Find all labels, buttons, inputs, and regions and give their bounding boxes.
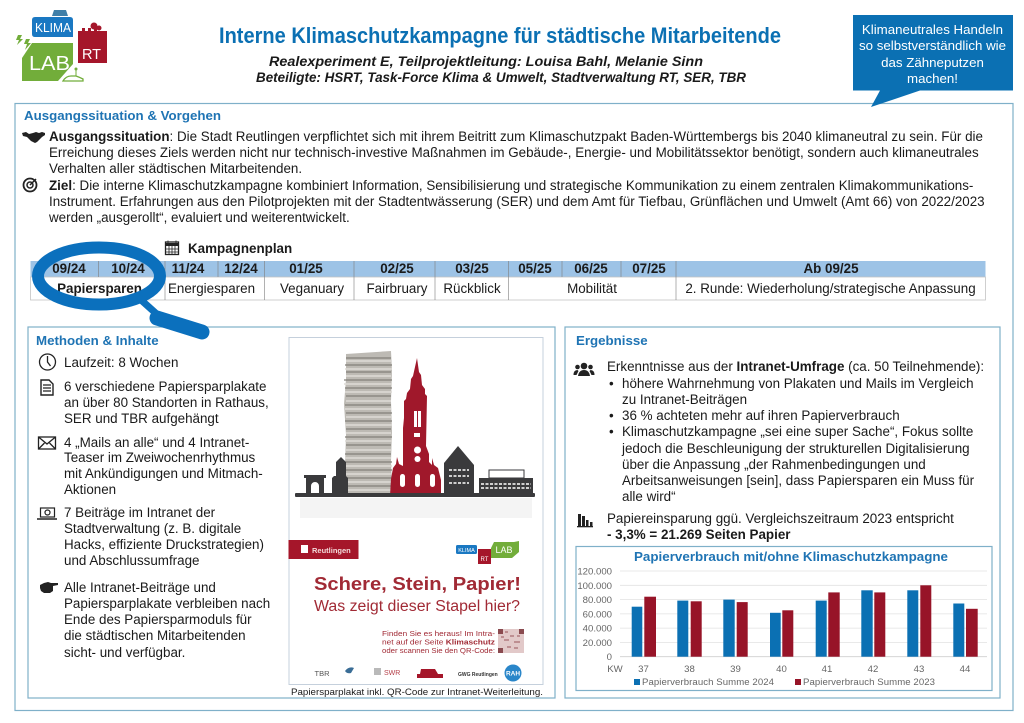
table: Kampagnenplan: 01/25: [289, 261, 323, 276]
x axis labels: 43: [914, 664, 924, 675]
logo: Klima Lab RT: RT: [82, 47, 101, 63]
y axis labels: 60.000: [583, 609, 612, 620]
table: Kampagnenplan: 06/25: [574, 261, 608, 276]
icon: envelope: [38, 437, 56, 449]
text: Mails und Teaser: mit Ankündigungen und Mitmach-: [64, 466, 263, 481]
table: Kampagnenplan: 2. Runde: Wiederholung/strategische Anpassung: [685, 281, 976, 296]
icon: document: [41, 380, 53, 395]
text: Verbleib: Ende des Papiersparmoduls für: [64, 612, 252, 627]
callout: slogan: Klimaneutrales Handeln: [862, 22, 1003, 37]
icon: QR code: [498, 629, 524, 653]
x axis labels: [607, 664, 971, 675]
partner logos: [314, 664, 522, 682]
table: Kampagnenplan: 10/24: [111, 261, 145, 276]
heading: Ergebnisse: Ergebnisse: [576, 333, 648, 348]
y axis labels: 40.000: [583, 624, 612, 635]
text block: Umfrage-Erkenntnisse: höhere Wahrnehmung von Plakaten und Mails im Vergleich: [622, 376, 974, 391]
logo: small Klima Lab RT: RT: [481, 557, 489, 563]
table: Kampagnenplan: Energiesparen: [168, 281, 255, 296]
text block: Ziel: [48, 178, 985, 225]
text block: Ziel: Instrument. Erfahrungen aus den Pilotprojekten mit der Stadtentwässerung (SER) und dem Amt für Tiefbau, Grünflächen und Umwelt (Amt 66) von 2022/2023: [49, 194, 985, 209]
partner logos: SWR: [384, 670, 400, 677]
table: Kampagnenplan: 03/25: [455, 261, 489, 276]
text: Beiträge: und Abschlussumfrage: [64, 553, 199, 568]
callout: slogan: [853, 15, 1013, 107]
text: Papiereinsparung: [607, 511, 954, 542]
text block: Ausgangssituation: Verhalten aller städtischen Mitarbeitenden.: [49, 161, 302, 176]
text block: Umfrage-Erkenntnisse: [607, 359, 984, 504]
table: Kampagnenplan: 07/25: [632, 261, 666, 276]
heading: Ausgangssituation & Vorgehen: Ausgangssituation & Vorgehen: [24, 108, 221, 123]
table: Kampagnenplan: Fairbruary: [366, 281, 428, 296]
x axis labels: 44: [960, 664, 971, 675]
text block: Umfrage-Erkenntnisse: Erkenntnisse aus der Intranet-Umfrage (ca. 50 Teilnehmende):: [607, 359, 984, 374]
icon: target: [24, 178, 36, 192]
icon: magnifying glass: [38, 248, 202, 332]
partner logos: GWG Reutlingen: [458, 672, 498, 678]
y axis labels: [577, 566, 612, 663]
table: Kampagnenplan: 05/25: [518, 261, 552, 276]
text: Verbleib: Alle Intranet-Beiträge und: [64, 580, 216, 595]
table: Kampagnenplan: 12/24: [224, 261, 258, 276]
logo: Reutlingen: [288, 540, 358, 559]
y axis labels: 20.000: [583, 638, 612, 649]
heading: Kampagnenplan: Kampagnenplan: [188, 241, 292, 256]
x axis labels: 39: [730, 664, 741, 675]
x axis labels: 41: [822, 664, 832, 675]
logo: Klima Lab RT: KLIMA: [35, 21, 72, 35]
icon: bar chart: [577, 514, 593, 527]
poster QR instructions: [382, 629, 495, 655]
text: Beiträge: 7 Beiträge im Intranet der: [64, 505, 216, 520]
text: Papiersparplakate: an über 80 Standorten in Rathaus,: [64, 395, 269, 410]
icon: people group: [574, 363, 594, 376]
bars 2023: [644, 585, 978, 657]
partner logos: TBR: [314, 669, 330, 678]
text block: Umfrage-Erkenntnisse: •: [609, 376, 614, 391]
text: Verbleib: Papiersparplakate verbleiben nach: [64, 596, 270, 611]
poster subheadline: Was zeigt dieser Stapel hier?: [314, 598, 520, 615]
text: Beiträge: Stadtverwaltung (z. B. digitale: [64, 521, 241, 536]
logo: Klima Lab RT: [16, 10, 107, 81]
text block: Umfrage-Erkenntnisse: über die Anpassung „der Rahmenbedingungen und: [622, 457, 926, 472]
icon: clock: [40, 354, 56, 370]
logo: Reutlingen: Reutlingen: [312, 546, 351, 555]
table: Kampagnenplan: [30, 261, 986, 300]
x axis labels: KW: [607, 664, 624, 675]
legend: Papierverbrauch Summe 2023: [803, 677, 935, 688]
subtitle: participants: Beteiligte: HSRT, Task-Force Klima & Umwelt, Stadtverwaltung RT, SER, TBR: [256, 70, 746, 85]
table: Kampagnenplan: 02/25: [380, 261, 414, 276]
image: red church silhouette: [390, 358, 441, 496]
callout: slogan: das Zähneputzen: [881, 55, 984, 70]
partner logos: RAH: [506, 670, 520, 678]
legend: [634, 677, 935, 688]
image: dark skyline buildings: [295, 446, 535, 497]
table: Kampagnenplan: Papiersparen: [57, 281, 142, 296]
x axis labels: 40: [776, 664, 787, 675]
text: Papiersparplakate: SER und TBR aufgehängt: [64, 411, 219, 426]
text: Mails und Teaser: Aktionen: [64, 482, 116, 497]
poster QR instructions: oder scannen Sie den QR-Code:: [382, 646, 495, 655]
poster QR instructions: net auf der Seite Klimaschutz: [382, 638, 495, 646]
text: Laufzeit: Laufzeit: 8 Wochen: [64, 355, 178, 370]
text block: Umfrage-Erkenntnisse: Arbeitsanweisungen [sein], dass Papiersparen ein Muss für: [622, 473, 975, 488]
image: church windows: [400, 411, 435, 487]
text: Mails und Teaser: 4 „Mails an alle“ und 4 Intranet-: [64, 435, 249, 450]
icon: calendar: [165, 240, 179, 254]
subtitle: project lead: Realexperiment E, Teilprojektleitung: Louisa Bahl, Melanie Sinn: [269, 54, 703, 69]
chart title: Papierverbrauch mit/ohne Klimaschutzkampagne: [634, 549, 948, 564]
text: Verbleib: sicht- und verfügbar.: [64, 645, 185, 660]
table: Kampagnenplan: Rückblick: [443, 281, 501, 296]
table: Kampagnenplan: Ab 09/25: [803, 261, 859, 276]
table: Kampagnenplan: Mobilität: [567, 281, 617, 296]
logo: small Klima Lab RT: LAB: [495, 545, 513, 555]
text: Mails und Teaser: Teaser im Zweiwochenrhythmus: [64, 450, 256, 465]
poster: Papiersparplakat: [288, 338, 543, 684]
heading: Methoden & Inhalte: Methoden & Inhalte: [36, 333, 159, 348]
text: Verbleib: [64, 580, 270, 660]
logo: small Klima Lab RT: KLIMA: [458, 548, 475, 554]
image: paper stack: [344, 351, 392, 495]
icon: handshake: [22, 132, 45, 143]
text block: Umfrage-Erkenntnisse: •: [609, 424, 614, 439]
y axis labels: 120.000: [577, 566, 612, 578]
y axis labels: 0: [607, 652, 612, 663]
bars 2024: [632, 590, 964, 657]
panel: Ergebnisse: [565, 327, 1000, 698]
text: Mails und Teaser: [64, 435, 263, 497]
text block: Ziel: werden „ausgerollt“, evaluiert und weiterentwickelt.: [48, 210, 350, 225]
legend: Papierverbrauch Summe 2024: [642, 677, 775, 688]
text: Papiersparplakate: [64, 379, 269, 426]
text: Beiträge: Hacks, effiziente Druckstrategien): [64, 537, 264, 552]
callout: slogan: so selbstverständlich wie: [859, 38, 1006, 53]
text: Beiträge: [64, 505, 264, 568]
text: Verbleib: die städtischen Mitarbeitenden: [64, 628, 246, 643]
icon: pointing hand: [40, 582, 58, 593]
logo: small Klima Lab RT: [456, 541, 519, 564]
logo: Klima Lab RT: LAB: [29, 53, 70, 75]
x axis labels: 38: [684, 664, 695, 675]
y axis labels: 100.000: [577, 581, 612, 592]
text: Papiereinsparung: Papiereinsparung ggü. Vergleichszeitraum 2023 entspricht: [607, 511, 954, 526]
text: Papiereinsparung: - 3,3% = 21.269 Seiten Papier: [607, 527, 791, 542]
x axis labels: 42: [868, 664, 878, 675]
poster headline: Schere, Stein, Papier!: [314, 573, 521, 594]
panel: Methoden & Inhalte: [28, 327, 555, 698]
text block: Umfrage-Erkenntnisse: 36 % achteten mehr auf ihren Papierverbrauch: [622, 408, 900, 423]
caption: poster: Papiersparplakat inkl. QR-Code zur Intranet-Weiterleitung.: [291, 687, 543, 698]
table: Kampagnenplan: Veganuary: [280, 281, 344, 296]
text block: Ausgangssituation: Ausgangssituation: Die Stadt Reutlingen verpflichtet sich mit ihrem Beitritt zum Klimaschutzpakt Baden-Württembergs bis 2040 klimaneutral zu sein. Für die: [49, 129, 983, 144]
x axis labels: 37: [638, 664, 649, 675]
text block: Ziel: Ziel: Die interne Klimaschutzkampagne kombiniert Information, Sensibilisierung und strategische Kommunikation zu einem zentralen Klimakommunikations-: [49, 178, 973, 193]
callout: slogan: machen!: [907, 71, 958, 86]
text block: Umfrage-Erkenntnisse: Klimaschutzkampagne „sei eine super Sache“, Fokus sollte: [622, 424, 973, 439]
text block: Ausgangssituation: Erreichung dieses Ziels werden nicht nur technisch-investive Maßnahmen im Gebäude-, Energie- und Mobilitätssektor benötigt, sondern auch klimaneutrales: [49, 145, 979, 160]
text block: Umfrage-Erkenntnisse: alle wird“: [622, 489, 676, 504]
image: faint reflection: [300, 498, 532, 518]
icon: laptop: [37, 508, 57, 519]
text block: Ausgangssituation: [49, 129, 983, 176]
table: Kampagnenplan: 11/24: [172, 261, 205, 276]
poster QR instructions: Finden Sie es heraus! Im Intra-: [382, 629, 495, 638]
text: Papiersparplakate: 6 verschiedene Papiersparplakate: [64, 379, 266, 394]
text block: Umfrage-Erkenntnisse: zu Intranet-Beiträgen: [622, 392, 747, 407]
table: Kampagnenplan: 09/24: [52, 261, 86, 276]
text block: Umfrage-Erkenntnisse: •: [609, 408, 614, 423]
y axis labels: 80.000: [583, 595, 612, 606]
title: Interne Klimaschutzkampagne für städtische Mitarbeitende: [219, 23, 781, 48]
text block: Umfrage-Erkenntnisse: jedoch die Beschleunigung der strukturellen Digitalisierung: [621, 441, 970, 456]
chart: Papierverbrauch: [576, 546, 992, 690]
